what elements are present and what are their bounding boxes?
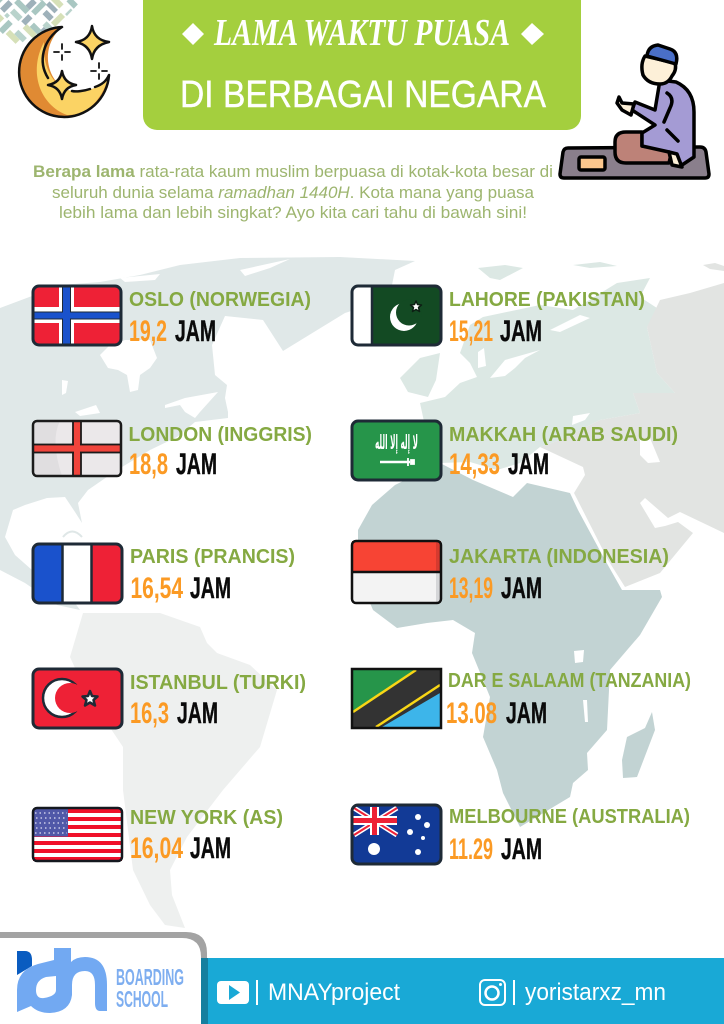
row: London, England: JAM [176,448,217,481]
row: New York, USA: 16,04 [130,832,183,865]
flag: France [33,544,122,603]
row: Jakarta, Indonesia [352,541,669,605]
icon: praying man on mat [560,45,709,178]
flag: England [33,421,121,476]
row: Lahore, Pakistan: JAM [500,315,542,348]
row: Dar es Salaam, Tanzania: 13.08 [446,697,497,730]
row: Makkah, Saudi Arabia: 14,33 [449,448,500,481]
world map background [0,257,724,928]
row: Melbourne, Australia: MELBOURNE (AUSTRALIA) [449,805,690,828]
row: Dar es Salaam, Tanzania [352,669,691,730]
flag: Saudi Arabia: لا إله إلا الله [375,430,418,454]
logo wordmark: SCHOOL [116,986,168,1012]
logo mark [17,948,107,1013]
row: New York, USA: NEW YORK (AS) [130,806,283,829]
row: Makkah, Saudi Arabia: JAM [508,448,549,481]
title banner [143,0,581,130]
flag: Norway [33,286,121,345]
row: Paris, France: PARIS (PRANCIS) [130,545,295,568]
intro paragraph [33,163,553,222]
row: Paris, France: JAM [190,572,231,605]
row: Makkah, Saudi Arabia [352,421,678,481]
row: London, England: LONDON (INGGRIS) [128,423,312,446]
row: Oslo, Norway: OSLO (NORWEGIA) [129,288,311,311]
row: Melbourne, Australia: JAM [501,833,542,866]
row: Lahore, Pakistan [352,286,645,348]
flag: Turkey [33,669,122,728]
intro paragraph: Berapa lama rata-rata kaum muslim berpuasa di kotak-kota besar di [33,163,553,181]
row: Dar es Salaam, Tanzania: DAR E SALAAM (TANZANIA) [448,669,691,692]
corner pattern [0,0,78,44]
row: Melbourne, Australia: 11.29 [449,833,493,866]
social: YouTube: MNAYproject [268,979,400,1006]
row: Lahore, Pakistan: LAHORE (PAKISTAN) [449,288,645,311]
footer bar [200,958,724,1024]
row: Oslo, Norway: 19,2 [129,315,167,348]
row: Dar es Salaam, Tanzania: JAM [506,697,547,730]
row: New York, USA [33,806,283,865]
row: Oslo, Norway [33,286,311,348]
icon: Instagram [480,980,505,1005]
icon: crescent moon with stars [19,26,109,117]
icon: YouTube [217,981,249,1004]
social: Instagram: yoristarxz_mn [525,979,666,1006]
row: Oslo, Norway: JAM [175,315,216,348]
row: Melbourne, Australia [352,805,690,866]
row: Istanbul, Turkey: JAM [177,697,218,730]
flag: Tanzania [352,669,441,728]
row: Istanbul, Turkey: 16,3 [130,697,169,730]
flag: Saudi Arabia [352,421,441,480]
flag: Pakistan [352,286,441,345]
row: Paris, France [33,544,295,605]
intro paragraph: seluruh dunia selama ramadhan 1440H . Kota mana yang puasa [52,184,534,202]
flag: USA [33,808,122,861]
row: Lahore, Pakistan: 15,21 [449,315,493,348]
logo panel [0,932,207,1024]
flag: Indonesia [352,541,441,603]
flag: Australia [352,805,441,864]
row: Istanbul, Turkey [33,669,306,730]
row: New York, USA: JAM [190,832,231,865]
title line 2: DI BERBAGAI NEGARA [180,74,547,116]
logo wordmark [116,964,184,1012]
intro paragraph: lebih lama dan lebih singkat? Ayo kita cari tahu di bawah sini! [59,204,527,222]
logo wordmark: BOARDING [116,964,184,990]
row: Jakarta, Indonesia: JAM [501,572,542,605]
row: London, England [33,421,312,481]
row: Jakarta, Indonesia: JAKARTA (INDONESIA) [449,545,669,568]
row: Istanbul, Turkey: ISTANBUL (TURKI) [130,671,306,694]
row: Jakarta, Indonesia: 13,19 [449,572,493,605]
row: Paris, France: 16,54 [130,572,183,605]
row: London, England: 18,8 [129,448,168,481]
row: Makkah, Saudi Arabia: MAKKAH (ARAB SAUDI) [449,423,678,446]
title line 1: LAMA WAKTU PUASA [213,12,510,54]
